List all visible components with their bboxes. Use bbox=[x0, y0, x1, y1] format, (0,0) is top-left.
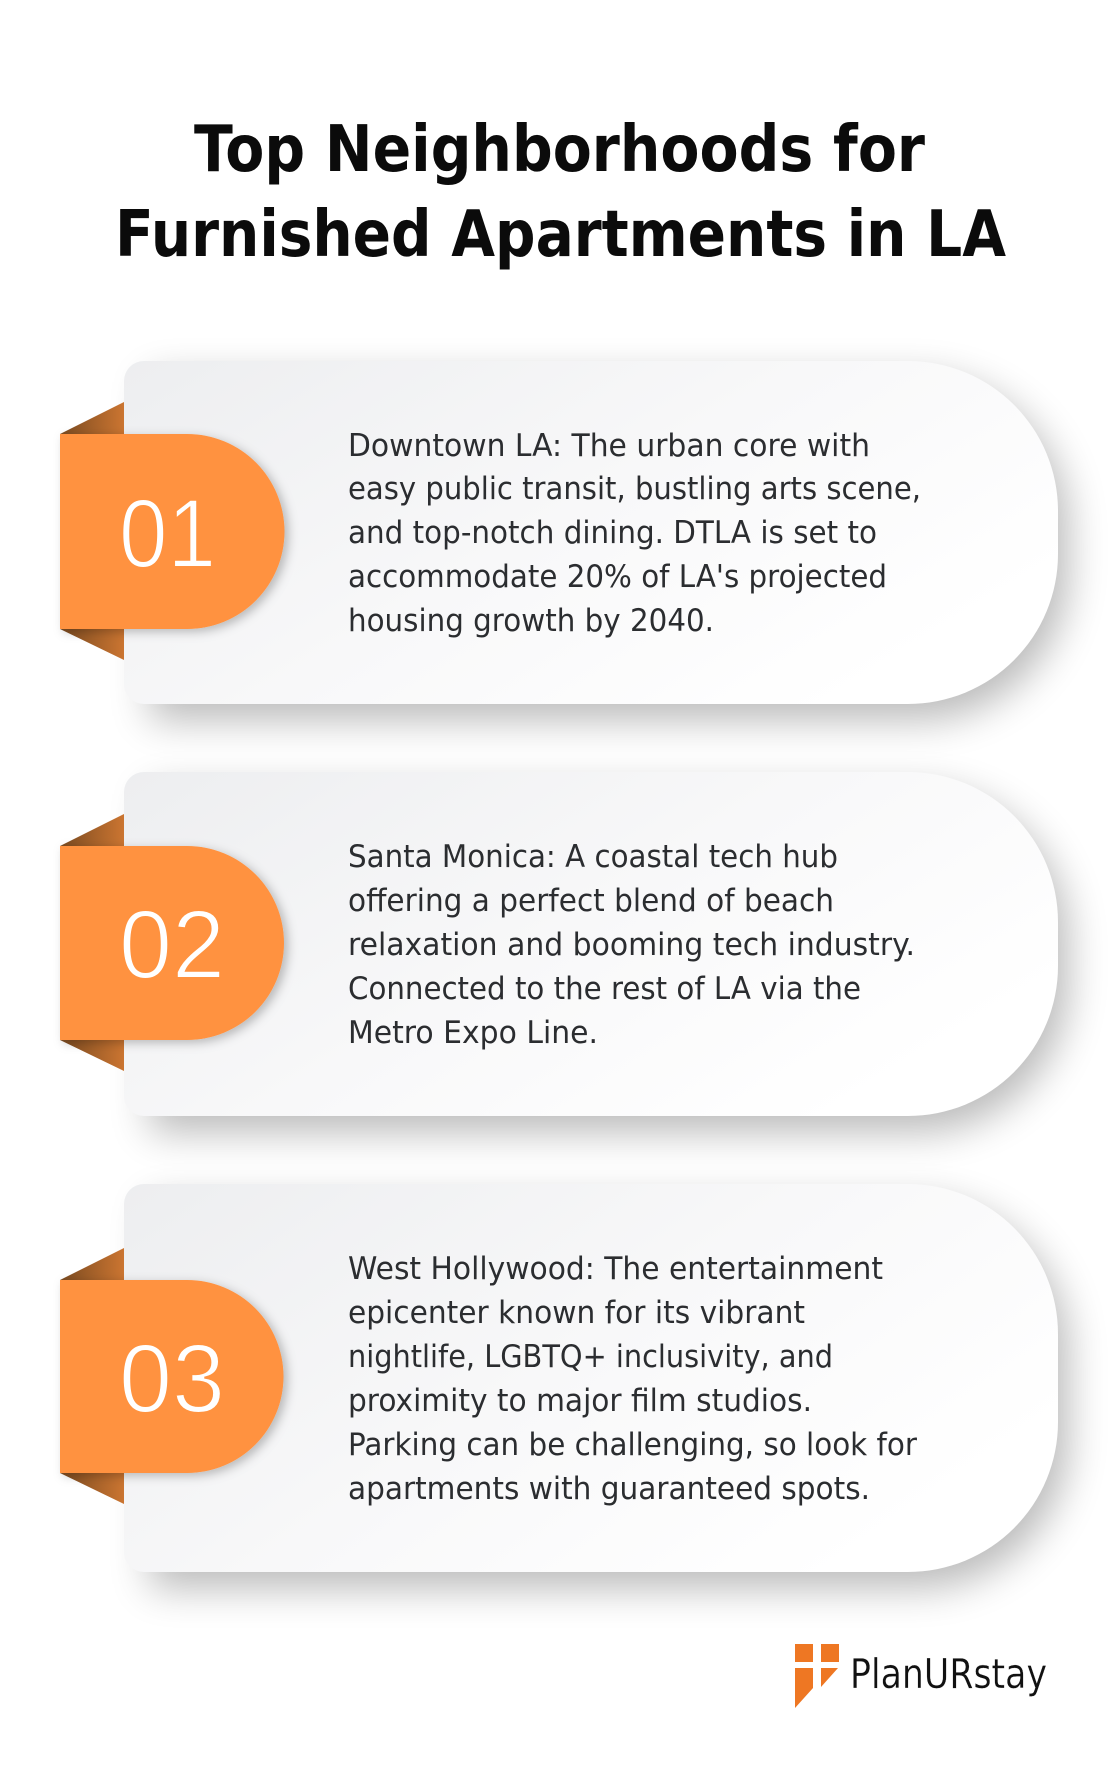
description: Parking can be challenging, so look for bbox=[348, 1427, 917, 1463]
ribbon fold: bottom bbox=[60, 1040, 124, 1071]
card bbox=[124, 772, 1058, 1116]
panel: West Hollywood bbox=[60, 1184, 1068, 1588]
wordmark: PlanURstay bbox=[850, 1650, 1047, 1698]
icon: logo mark bbox=[795, 1644, 839, 1708]
number badge bbox=[60, 846, 284, 1040]
logo: PlanURstay bbox=[795, 1644, 1047, 1708]
title: Top Neighborhoods for bbox=[194, 113, 925, 187]
description: and top-notch dining. DTLA is set to bbox=[348, 515, 877, 551]
description: Downtown LA: The urban core with bbox=[348, 428, 870, 464]
panel: Downtown LA bbox=[60, 361, 1068, 720]
number badge bbox=[60, 434, 284, 629]
number: 03 bbox=[119, 1324, 225, 1433]
description: epicenter known for its vibrant bbox=[348, 1295, 805, 1331]
ribbon fold: top bbox=[60, 402, 124, 434]
card bbox=[124, 361, 1058, 704]
description: easy public transit, bustling arts scene, bbox=[348, 471, 921, 507]
description: nightlife, LGBTQ+ inclusivity, and bbox=[348, 1339, 833, 1375]
ribbon fold: top bbox=[60, 814, 124, 846]
description: accommodate 20% of LA's projected bbox=[348, 559, 887, 595]
description: West Hollywood: The entertainment bbox=[348, 1251, 883, 1287]
number badge bbox=[60, 1280, 284, 1473]
description: Santa Monica: A coastal tech hub bbox=[348, 839, 838, 875]
description bbox=[348, 428, 921, 639]
description bbox=[348, 1251, 917, 1507]
ribbon fold: bottom bbox=[60, 1473, 124, 1504]
ribbon fold: bottom bbox=[60, 629, 124, 660]
title: Furnished Apartments in LA bbox=[115, 198, 1006, 272]
description: proximity to major film studios. bbox=[348, 1383, 812, 1419]
panel: Santa Monica bbox=[60, 772, 1068, 1132]
description: housing growth by 2040. bbox=[348, 603, 714, 639]
title bbox=[115, 113, 1006, 272]
ribbon fold: top bbox=[60, 1248, 124, 1280]
description: offering a perfect blend of beach bbox=[348, 883, 834, 919]
description: relaxation and booming tech industry. bbox=[348, 927, 915, 963]
description: apartments with guaranteed spots. bbox=[348, 1471, 870, 1507]
description: Metro Expo Line. bbox=[348, 1015, 598, 1051]
number: 02 bbox=[119, 890, 225, 999]
description bbox=[348, 839, 915, 1051]
description: Connected to the rest of LA via the bbox=[348, 971, 861, 1007]
number: 01 bbox=[119, 479, 216, 588]
card bbox=[124, 1184, 1058, 1572]
